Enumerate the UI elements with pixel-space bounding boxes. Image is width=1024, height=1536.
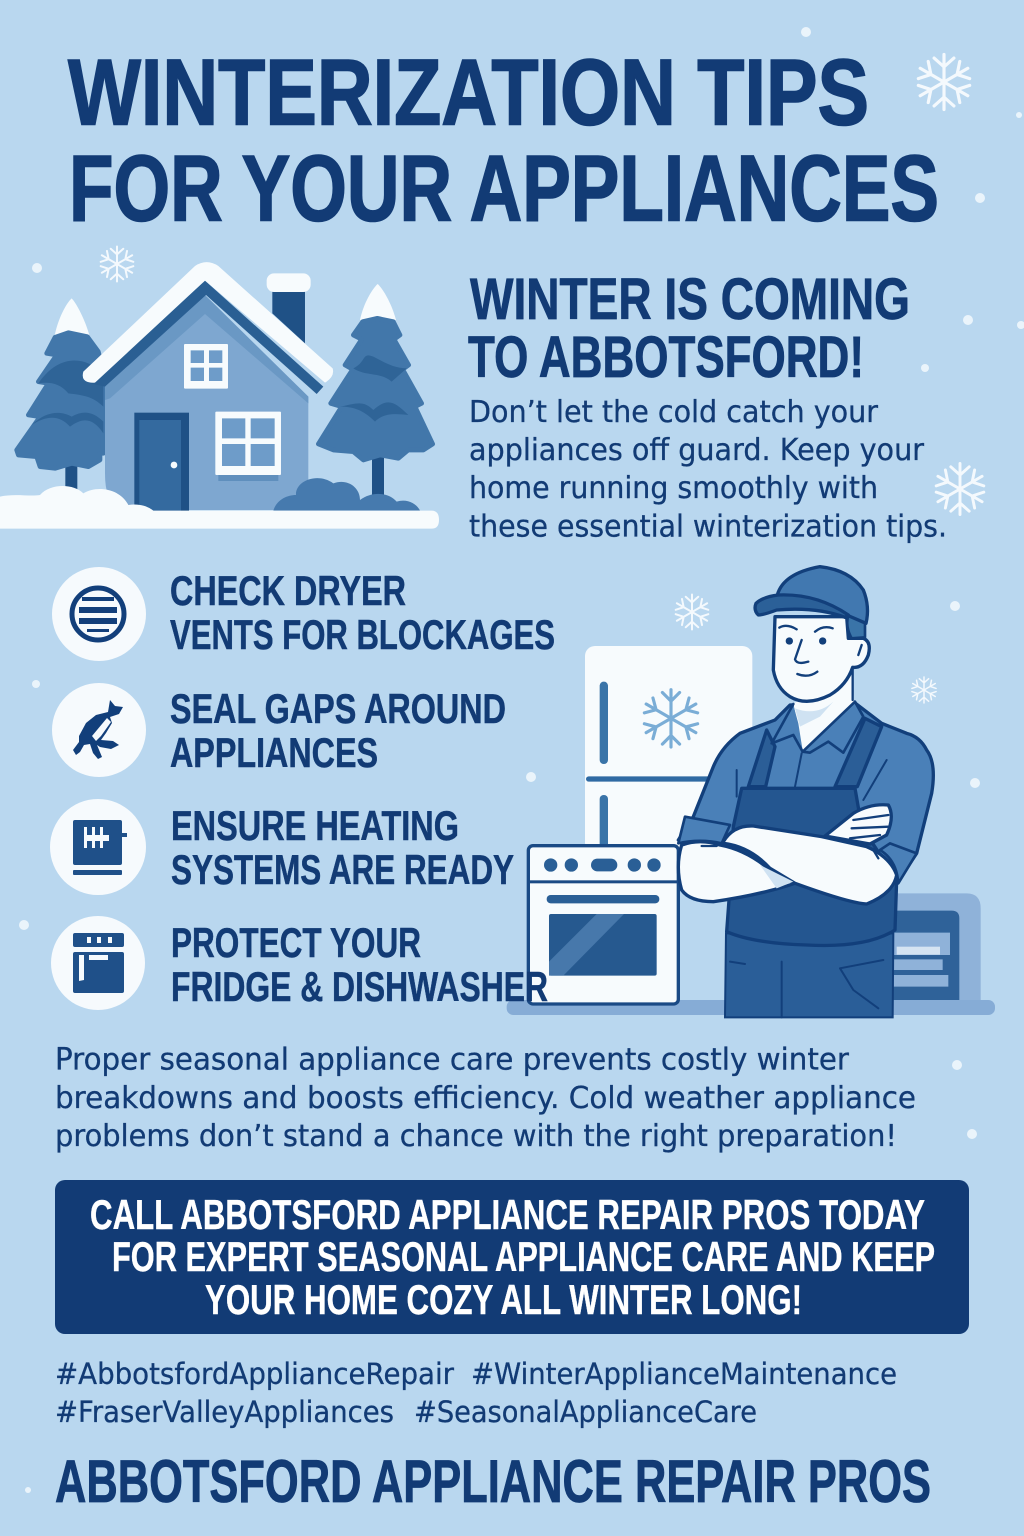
tip list [170,567,555,1010]
intro text: Don’t let the cold catch your [469,395,879,430]
hashtags: #WinterApplianceMaintenance [471,1357,897,1391]
body paragraph: Proper seasonal appliance care prevents costly winter [55,1042,850,1078]
call to action banner: YOUR HOME COZY ALL WINTER LONG! [205,1276,802,1323]
collar and braces [737,702,887,800]
technician and appliances illustration [507,567,995,1017]
fridge [585,646,752,853]
intro text: these essential winterization tips. [469,510,947,544]
body paragraph [55,1042,916,1154]
apron [727,788,897,946]
house illustration [0,262,439,529]
tip list: FRIDGE & DISHWASHER [171,963,548,1010]
cap [755,567,867,638]
large window [215,412,281,481]
icon: heating system [50,799,146,895]
hashtags: #FraserValleyAppliances [55,1395,394,1429]
chimney [267,273,311,343]
snow ground [0,486,439,529]
crossed forearms [678,805,917,904]
intro text: appliances off guard. Keep your [469,433,925,468]
house walls [105,295,308,510]
intro text: home running smoothly with [469,471,878,506]
door [134,413,189,511]
hashtags: #SeasonalApplianceCare [414,1395,757,1429]
neck [793,675,854,751]
left tree [17,298,103,493]
hashtags [55,1357,897,1429]
technician [678,567,933,1017]
trousers [725,933,893,1017]
body paragraph: breakdowns and boosts efficiency. Cold weather appliance [55,1081,916,1116]
tip list: SYSTEMS ARE READY [171,846,514,893]
intro text [469,395,947,544]
fridge snowflake [642,690,700,747]
winter heading: TO ABBOTSFORD! [468,325,864,390]
tip list: SEAL GAPS AROUND [170,685,506,732]
roof [83,262,333,394]
winter heading: WINTER IS COMING [470,267,910,332]
shirt [678,702,933,883]
title [68,40,939,240]
floor [507,1000,995,1015]
head [773,617,869,701]
tip list: ENSURE HEATING [171,802,459,849]
icon: sealant gun [52,683,146,777]
winter heading [468,267,910,390]
icon: appliance [51,916,145,1010]
tip list: PROTECT YOUR [171,919,421,966]
hashtags: #AbbotsfordApplianceRepair [55,1357,454,1391]
tip list: APPLIANCES [170,729,378,776]
call to action banner [55,1180,969,1334]
body paragraph: problems don’t stand a chance with the right preparation! [55,1119,897,1154]
tip list: VENTS FOR BLOCKAGES [170,611,555,658]
right tree [318,284,433,495]
background appliance [890,893,981,1000]
title: WINTERIZATION TIPS [68,40,869,144]
bush [273,478,420,511]
tip list: CHECK DRYER [170,567,406,614]
attic window [184,344,228,389]
icon: dryer vent [52,567,146,661]
stove [528,846,678,1004]
